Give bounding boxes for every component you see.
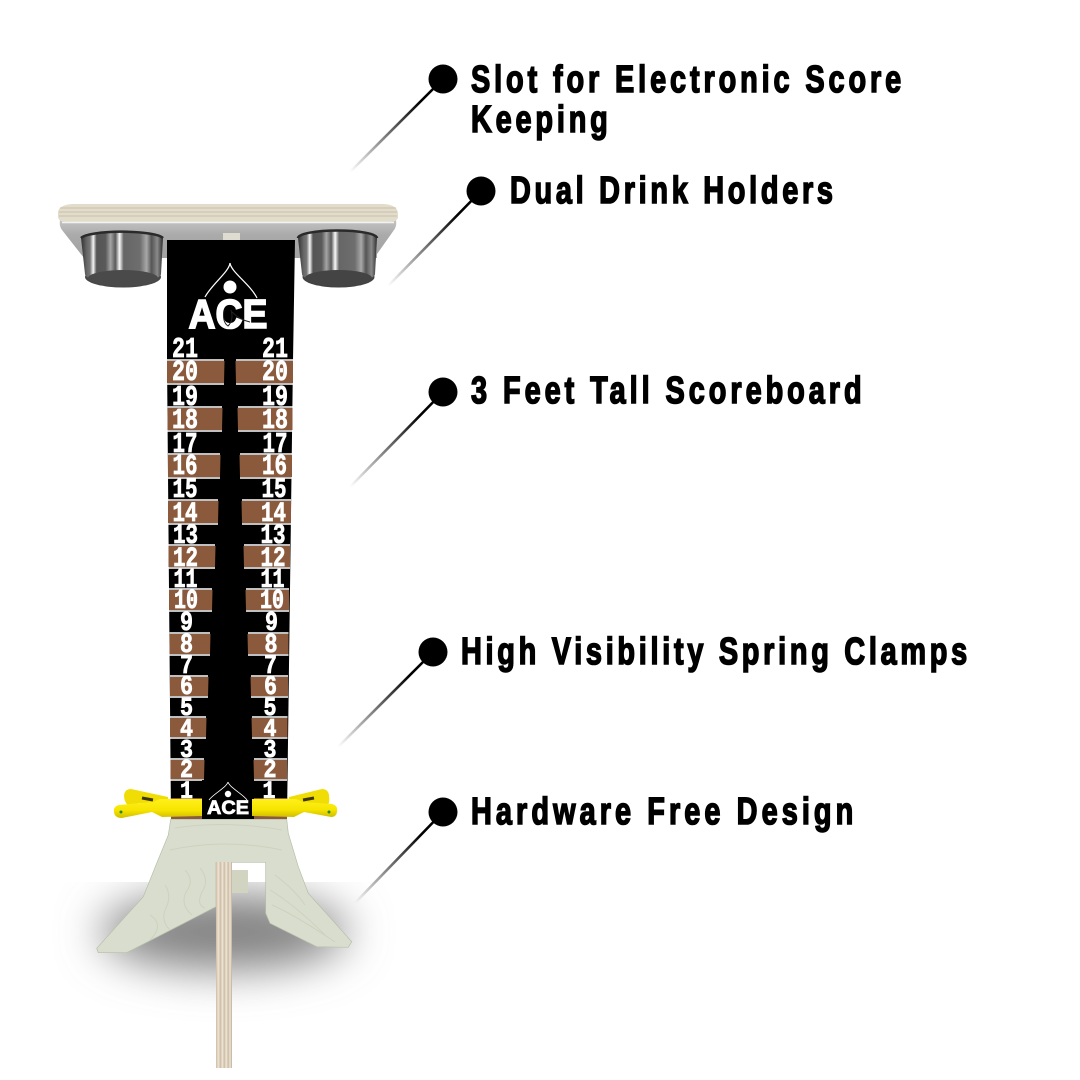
small ACE logo: ACE [207, 798, 249, 819]
left score numbers: 4 [180, 714, 193, 744]
white row rules [167, 360, 293, 780]
left score numbers: 11 [174, 566, 198, 596]
right score numbers: 17 [262, 428, 288, 461]
right score numbers: 20 [262, 356, 288, 389]
right score numbers: 16 [262, 450, 287, 483]
leader line and dot [388, 176, 496, 286]
shelf underside [60, 220, 396, 258]
callout: 3 feet tall scoreboard [350, 369, 862, 487]
ground shadow [100, 894, 348, 970]
right cup holder [298, 231, 377, 288]
left score numbers: 21 [172, 333, 198, 366]
left score numbers: 3 [180, 735, 193, 765]
label text: High Visibility Spring Clamps [461, 630, 967, 673]
right score numbers: 9 [265, 609, 278, 639]
label text: Keeping [471, 98, 608, 141]
right yellow spring clamp [252, 789, 337, 817]
small ACE logo [202, 780, 254, 819]
right score numbers: 7 [264, 652, 277, 682]
right score numbers: 18 [262, 404, 288, 437]
right score numbers: 21 [262, 333, 288, 366]
right score numbers: 6 [264, 673, 277, 703]
left score numbers: 14 [172, 499, 198, 530]
label text: 3 Feet Tall Scoreboard [471, 369, 862, 412]
leader line and dot [350, 64, 458, 172]
left score numbers: 17 [172, 428, 198, 461]
callout: dual drink holders [388, 169, 833, 286]
scoreboard panel [167, 240, 295, 819]
right score numbers: 11 [260, 566, 284, 596]
right score numbers: 2 [264, 755, 276, 785]
right score numbers: 5 [264, 693, 276, 723]
vertical stand post [216, 862, 232, 1068]
left score numbers: 6 [180, 673, 193, 703]
brown score rows [167, 361, 293, 819]
label text: Hardware Free Design [471, 790, 853, 833]
slot notch [223, 233, 240, 241]
right score numbers: 8 [264, 631, 278, 661]
shelf plywood edge [58, 204, 398, 222]
left score numbers: 1 [180, 777, 193, 806]
right score numbers [260, 333, 288, 806]
top shelf with drink holders [58, 204, 398, 288]
left score numbers: 9 [180, 609, 193, 639]
left score numbers: 16 [172, 450, 198, 483]
right score numbers: 3 [264, 735, 276, 765]
left score numbers: 2 [180, 755, 193, 785]
left score numbers: 10 [174, 587, 198, 617]
callout: hardware free design [355, 790, 853, 903]
leader line and dot [350, 378, 458, 487]
label text: Dual Drink Holders [510, 169, 833, 212]
left cup holder [81, 232, 163, 288]
wooden stand base [97, 819, 352, 1068]
left score numbers: 7 [180, 652, 193, 682]
leader line and dot [338, 638, 448, 747]
right score numbers: 15 [262, 475, 286, 506]
left score numbers: 13 [173, 521, 198, 552]
left score numbers: 19 [172, 381, 198, 414]
ACE logo: ACE [188, 291, 268, 337]
left score numbers: 15 [172, 475, 198, 506]
callout: high visibility spring clamps [338, 630, 967, 747]
left score numbers: 18 [172, 404, 198, 437]
left score numbers [172, 333, 198, 806]
left score numbers: 5 [180, 693, 193, 723]
label text [471, 58, 901, 141]
right score numbers: 1 [262, 777, 276, 806]
black board [167, 240, 295, 819]
right score numbers: 12 [260, 544, 286, 575]
left score numbers: 8 [180, 631, 193, 661]
stand tab [231, 870, 248, 893]
ACE logo [188, 263, 268, 337]
label text: Slot for Electronic Score [471, 58, 901, 101]
leader line and dot [355, 798, 458, 903]
right score numbers: 14 [261, 499, 286, 530]
left score numbers: 12 [173, 544, 198, 575]
right score numbers: 10 [260, 587, 284, 617]
right score numbers: 4 [264, 714, 276, 744]
callout: slot for electronic score keeping [350, 58, 901, 172]
right score numbers: 13 [260, 521, 286, 552]
left score numbers: 20 [172, 356, 198, 389]
left yellow spring clamp [114, 789, 202, 818]
right score numbers: 19 [262, 381, 288, 414]
